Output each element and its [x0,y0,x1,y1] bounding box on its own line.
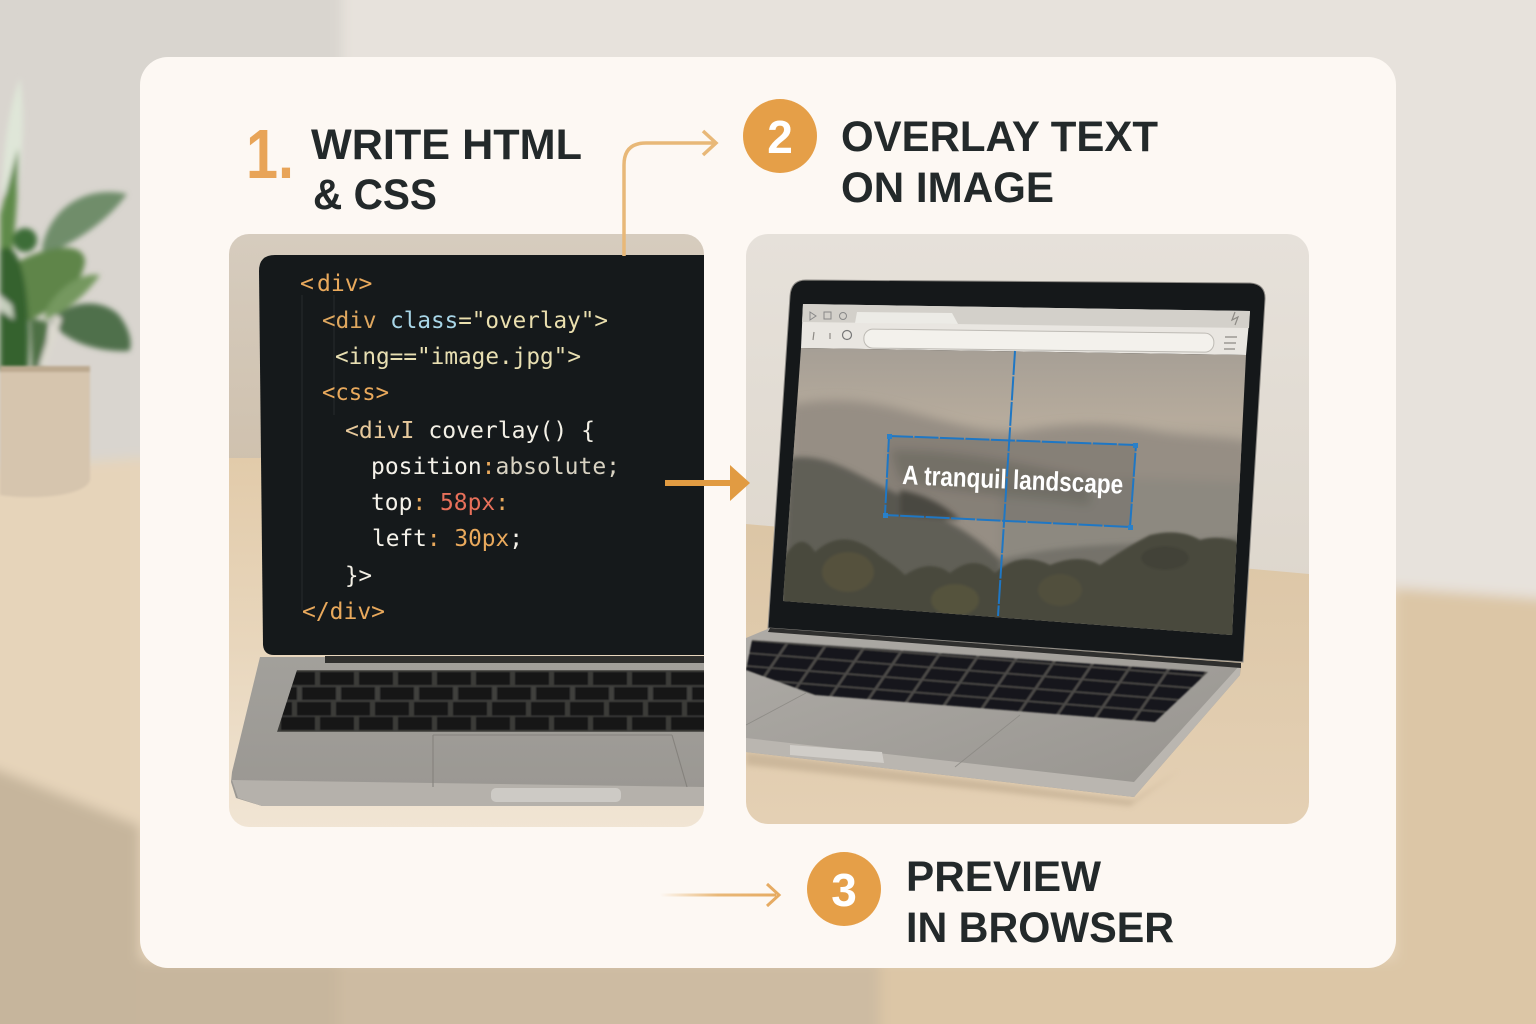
laptop lid [768,280,1265,662]
step 2 badge [743,99,817,173]
step 2 heading [841,113,1158,212]
code lines: <div class="overlay"> [322,308,608,334]
code lines: position:absolute; [371,454,620,480]
overlay text: A tranquil landscape [902,460,1124,500]
code lines: </div> [302,599,385,625]
step 2 heading: OVERLAY TEXT [841,113,1158,161]
step 1 heading: WRITE HTML [311,121,582,169]
code lines: <css> [322,380,389,406]
landscape image [780,345,1250,640]
laptop base [231,656,710,806]
step 1 heading [246,115,582,219]
step 3 heading: IN BROWSER [906,904,1174,952]
code lines: <divI coverlay() { [345,418,595,444]
plant pot [0,366,90,497]
step 3 heading [906,853,1174,952]
code lines: left: 30px; [372,526,523,552]
code lines: }> [345,563,372,589]
laptop shadow [746,752,1180,806]
step 3 heading: PREVIEW [906,853,1101,901]
plant [0,78,131,370]
main card [140,57,1396,968]
arrow: step 1 to step 2 [624,131,716,256]
blue overlay guides [885,351,1136,616]
step 1 heading: & CSS [313,171,437,219]
code lines: <ing=="image.jpg"> [335,344,581,370]
step 2 heading: ON IMAGE [841,164,1054,212]
step 1 heading: 1. [246,115,294,193]
panel: browser preview laptop [746,234,1309,824]
browser screen [780,304,1250,640]
code lines: div> [317,271,372,297]
arrow: code to preview [665,465,750,501]
arrow: to browser preview [660,884,779,906]
code lines: < [300,271,314,297]
laptop screen with code [259,255,704,655]
code lines [300,271,620,625]
step 2 badge: 2 [767,111,793,163]
step 3 badge: 3 [831,864,857,916]
panel: code editor laptop [229,234,710,830]
code lines: top: 58px: [371,490,509,516]
step 3 badge [807,852,881,926]
laptop base [746,628,1241,797]
